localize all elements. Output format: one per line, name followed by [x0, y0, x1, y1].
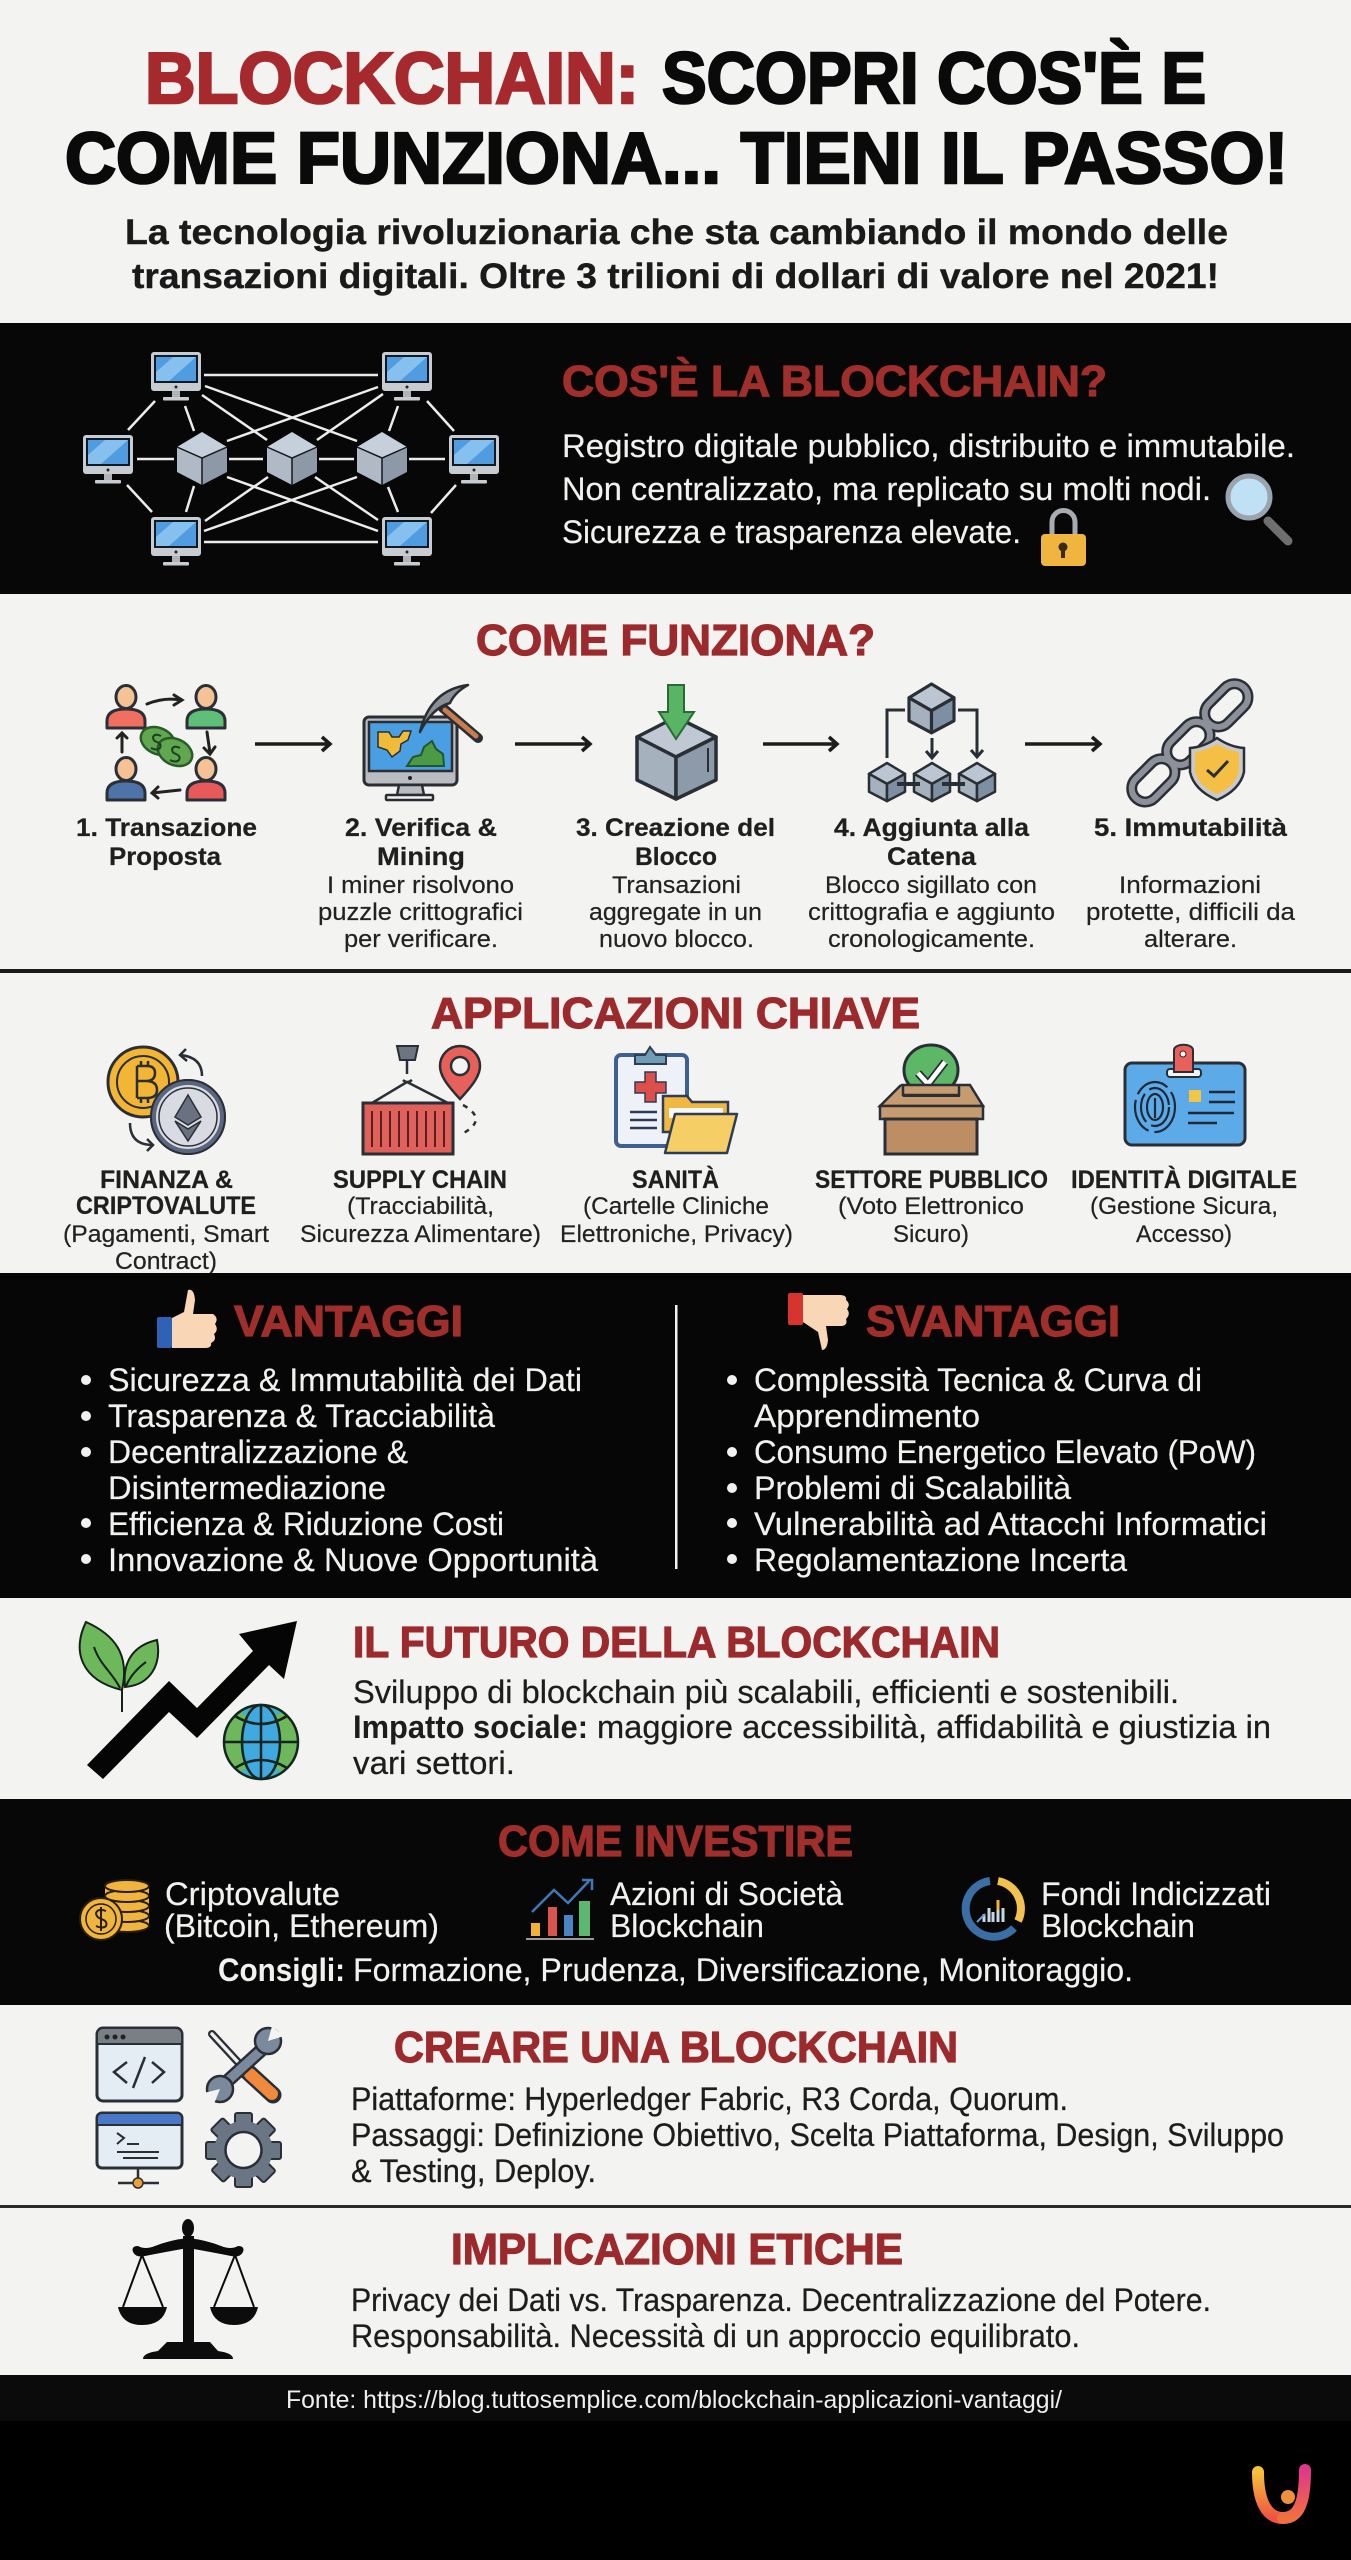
step 3 label: nuovo blocco.: [599, 926, 754, 953]
icon: leaves: [80, 1622, 158, 1712]
subtitle: La tecnologia rivoluzionaria che sta cambiando il mondo delle: [125, 213, 1228, 252]
step 5 label: Informazioni: [1119, 872, 1261, 899]
list: svantaggi: [727, 1362, 1267, 1578]
icon: thumbs down: [788, 1293, 849, 1350]
step 3 label: 3. Creazione del: [576, 814, 775, 842]
list: svantaggi: Apprendimento: [754, 1398, 980, 1434]
title: SCOPRI COS'È E: [662, 39, 1206, 119]
icon: supply chain container: [363, 1046, 480, 1154]
icon: padlock: [1041, 510, 1086, 566]
step 3 label: [576, 814, 775, 953]
icon: immutability chain and shield: [1126, 678, 1254, 808]
application label: finance: (Pagamenti, Smart: [63, 1221, 269, 1248]
source line: Fonte: https://blog.tuttosemplice.com/blockchain-applicazioni-vantaggi/: [286, 2386, 1062, 2414]
icon: transaction: [107, 686, 225, 800]
icon: rising chart: [526, 1880, 594, 1939]
heading: implicazioni etiche: IMPLICAZIONI ETICHE: [451, 2225, 903, 2274]
description text: Passaggi: Definizione Obiettivo, Scelta Piattaforma, Design, Sviluppo: [351, 2117, 1284, 2153]
step 3 label: Blocco: [635, 843, 717, 871]
application label: finance: Contract): [115, 1248, 217, 1275]
network diagram: [83, 352, 499, 566]
icon: gear: [206, 2113, 281, 2187]
list: vantaggi: Disintermediazione: [108, 1470, 386, 1506]
icon: magnifier: [1228, 476, 1288, 541]
step 2 label: Mining: [377, 843, 465, 871]
icon: growth arrow: [87, 1621, 297, 1779]
arrow 2: [515, 737, 590, 751]
step 4 label: crittografia e aggiunto: [808, 899, 1055, 926]
header: [65, 39, 1288, 296]
step 3 label: Transazioni: [612, 872, 741, 899]
step 5 label: [1086, 814, 1296, 953]
description text: Piattaforme: Hyperledger Fabric, R3 Corda, Quorum.: [351, 2081, 1068, 2117]
icon: digital identity card: [1125, 1045, 1245, 1145]
panel: il futuro della blockchain: [0, 1598, 1351, 1799]
heading: svantaggi: SVANTAGGI: [866, 1297, 1120, 1346]
description text: Registro digitale pubblico, distribuito e immutabile.: [562, 428, 1295, 464]
heading: come funziona: COME FUNZIONA?: [476, 616, 875, 665]
investment: criptovalute: (Bitcoin, Ethereum): [164, 1908, 439, 1944]
icon: block creation: [637, 685, 716, 799]
step 4 label: Catena: [887, 843, 977, 871]
panel: footer: [0, 2375, 1351, 2560]
icon: code window: [97, 2028, 182, 2101]
heading: vantaggi: VANTAGGI: [234, 1297, 463, 1346]
description text: [353, 1674, 1271, 1781]
step 2 label: 2. Verifica &: [345, 814, 497, 842]
investment: fondi: Fondi Indicizzati: [1041, 1876, 1271, 1912]
panel: come funziona: [0, 594, 1351, 973]
list: vantaggi: [81, 1362, 598, 1578]
panel: applicazioni chiave: [0, 973, 1351, 1275]
heading: come investire: COME INVESTIRE: [498, 1817, 853, 1866]
investment: fondi: [1041, 1876, 1271, 1944]
step 1 label: Proposta: [109, 843, 222, 871]
heading: il futuro: IL FUTURO DELLA BLOCKCHAIN: [353, 1618, 1000, 1667]
description text: [351, 2282, 1211, 2354]
icon: health folder and clipboard: [616, 1047, 737, 1153]
application label: finance: [63, 1166, 269, 1275]
description text: vari settori.: [353, 1745, 515, 1781]
description text: Privacy dei Dati vs. Trasparenza. Decentralizzazione del Potere.: [351, 2282, 1211, 2318]
description text: maggiore accessibilità, affidabilità e giustizia in: [597, 1709, 1271, 1745]
application label: finance: FINANZA &: [100, 1166, 233, 1194]
list: svantaggi: Vulnerabilità ad Attacchi Informatici: [754, 1506, 1267, 1542]
description text: [562, 428, 1295, 550]
list: vantaggi: Trasparenza & Tracciabilità: [108, 1398, 495, 1434]
icon: globe: [224, 1705, 298, 1779]
panel: implicazioni etiche: [0, 2208, 1351, 2375]
icon: verification and mining: [364, 685, 478, 800]
application label: public sector: Sicuro): [893, 1221, 969, 1248]
list: vantaggi: Sicurezza & Immutabilità dei Dati: [108, 1362, 582, 1398]
subtitle: transazioni digitali. Oltre 3 trilioni di dollari di valore nel 2021!: [132, 257, 1219, 296]
investment: azioni: Blockchain: [610, 1908, 764, 1944]
list: svantaggi: Problemi di Scalabilità: [754, 1470, 1071, 1506]
description text: Impatto sociale:: [353, 1709, 588, 1745]
investment: azioni: Azioni di Società: [610, 1876, 843, 1912]
arrow 4: [1025, 737, 1100, 751]
list: vantaggi: Efficienza & Riduzione Costi: [108, 1506, 504, 1542]
title: BLOCKCHAIN:: [145, 39, 639, 119]
step 4 label: [808, 814, 1055, 953]
step 4 label: Blocco sigillato con: [825, 872, 1037, 899]
investment: criptovalute: Criptovalute: [165, 1876, 340, 1912]
icon: ballot box: [880, 1045, 983, 1154]
investment: azioni: [610, 1876, 843, 1944]
title: [65, 39, 1288, 199]
step 5 label: alterare.: [1144, 926, 1237, 953]
panel: creare una blockchain: [0, 2005, 1351, 2205]
step 5 label: protette, difficili da: [1086, 899, 1296, 926]
step 3 label: aggregate in un: [589, 899, 762, 926]
step 4 label: 4. Aggiunta alla: [834, 814, 1030, 842]
description text: Non centralizzato, ma replicato su molti nodi.: [562, 471, 1211, 507]
list: svantaggi: Regolamentazione Incerta: [754, 1542, 1127, 1578]
subtitle: [125, 213, 1228, 296]
application label: public sector: SETTORE PUBBLICO: [815, 1166, 1048, 1194]
icon: add to chain: [869, 684, 995, 801]
icon: thumbs up: [157, 1290, 217, 1348]
investment tips: Formazione, Prudenza, Diversificazione, Monitoraggio.: [353, 1952, 1133, 1988]
arrow 3: [763, 737, 837, 751]
investment: fondi: Blockchain: [1041, 1908, 1195, 1944]
panel: cos'è la blockchain: [0, 323, 1351, 594]
step 2 label: I miner risolvono: [327, 872, 514, 899]
investment: criptovalute: [164, 1876, 439, 1944]
step 4 label: cronologicamente.: [828, 926, 1035, 953]
list: svantaggi: Consumo Energetico Elevato (PoW): [754, 1434, 1256, 1470]
panel: vantaggi e svantaggi: [0, 1273, 1351, 1598]
description text: [351, 2081, 1284, 2189]
step 1 label: [76, 814, 257, 871]
icon: scales of justice: [118, 2219, 258, 2359]
list: vantaggi: Decentralizzazione &: [108, 1434, 408, 1470]
application label: digital identity: IDENTITÀ DIGITALE: [1071, 1165, 1297, 1194]
application label: public sector: [815, 1166, 1048, 1248]
heading: applicazioni chiave: APPLICAZIONI CHIAVE: [431, 989, 920, 1038]
application label: supply chain: [300, 1166, 541, 1248]
arrow 1: [255, 737, 330, 751]
panel: come investire: [0, 1799, 1351, 2005]
description text: Sviluppo di blockchain più scalabili, efficienti e sostenibili.: [353, 1674, 1179, 1710]
logo: [1258, 2470, 1305, 2518]
icon: index fund: [966, 1881, 1021, 1937]
heading: cos'è la blockchain: COS'È LA BLOCKCHAIN?: [562, 356, 1107, 406]
application label: supply chain: (Tracciabilità,: [347, 1193, 494, 1220]
step 5 label: 5. Immutabilità: [1094, 814, 1287, 842]
application label: health: (Cartelle Cliniche: [583, 1193, 769, 1220]
application label: digital identity: (Gestione Sicura,: [1090, 1193, 1278, 1220]
step 2 label: per verificare.: [344, 926, 498, 953]
application label: health: SANITÀ: [632, 1165, 719, 1194]
icon: terminal: [97, 2113, 182, 2188]
description text: Responsabilità. Necessità di un approccio equilibrato.: [351, 2318, 1080, 2354]
heading: creare una blockchain: CREARE UNA BLOCKCHAIN: [394, 2023, 958, 2072]
description text: & Testing, Deploy.: [351, 2153, 596, 2189]
list: vantaggi: Innovazione & Nuove Opportunità: [108, 1542, 598, 1578]
application label: finance: CRIPTOVALUTE: [76, 1192, 256, 1220]
application label: digital identity: Accesso): [1136, 1221, 1232, 1248]
title: COME FUNZIONA... TIENI IL PASSO!: [65, 119, 1288, 199]
application label: supply chain: SUPPLY CHAIN: [333, 1166, 507, 1194]
icon: tools: [204, 2026, 284, 2104]
application label: supply chain: Sicurezza Alimentare): [300, 1221, 541, 1248]
step 2 label: [318, 814, 523, 953]
application label: public sector: (Voto Elettronico: [838, 1193, 1024, 1220]
step 2 label: puzzle crittografici: [318, 899, 523, 926]
application label: digital identity: [1071, 1165, 1297, 1248]
step 1 label: 1. Transazione: [76, 814, 257, 842]
list: svantaggi: Complessità Tecnica & Curva di: [754, 1362, 1202, 1398]
application label: health: [560, 1165, 793, 1248]
investment tips: Consigli:: [218, 1952, 345, 1988]
icon: crypto coins: [108, 1047, 225, 1154]
application label: health: Elettroniche, Privacy): [560, 1221, 793, 1248]
description text: Sicurezza e trasparenza elevate.: [562, 514, 1021, 550]
icon: coins: [80, 1880, 149, 1940]
